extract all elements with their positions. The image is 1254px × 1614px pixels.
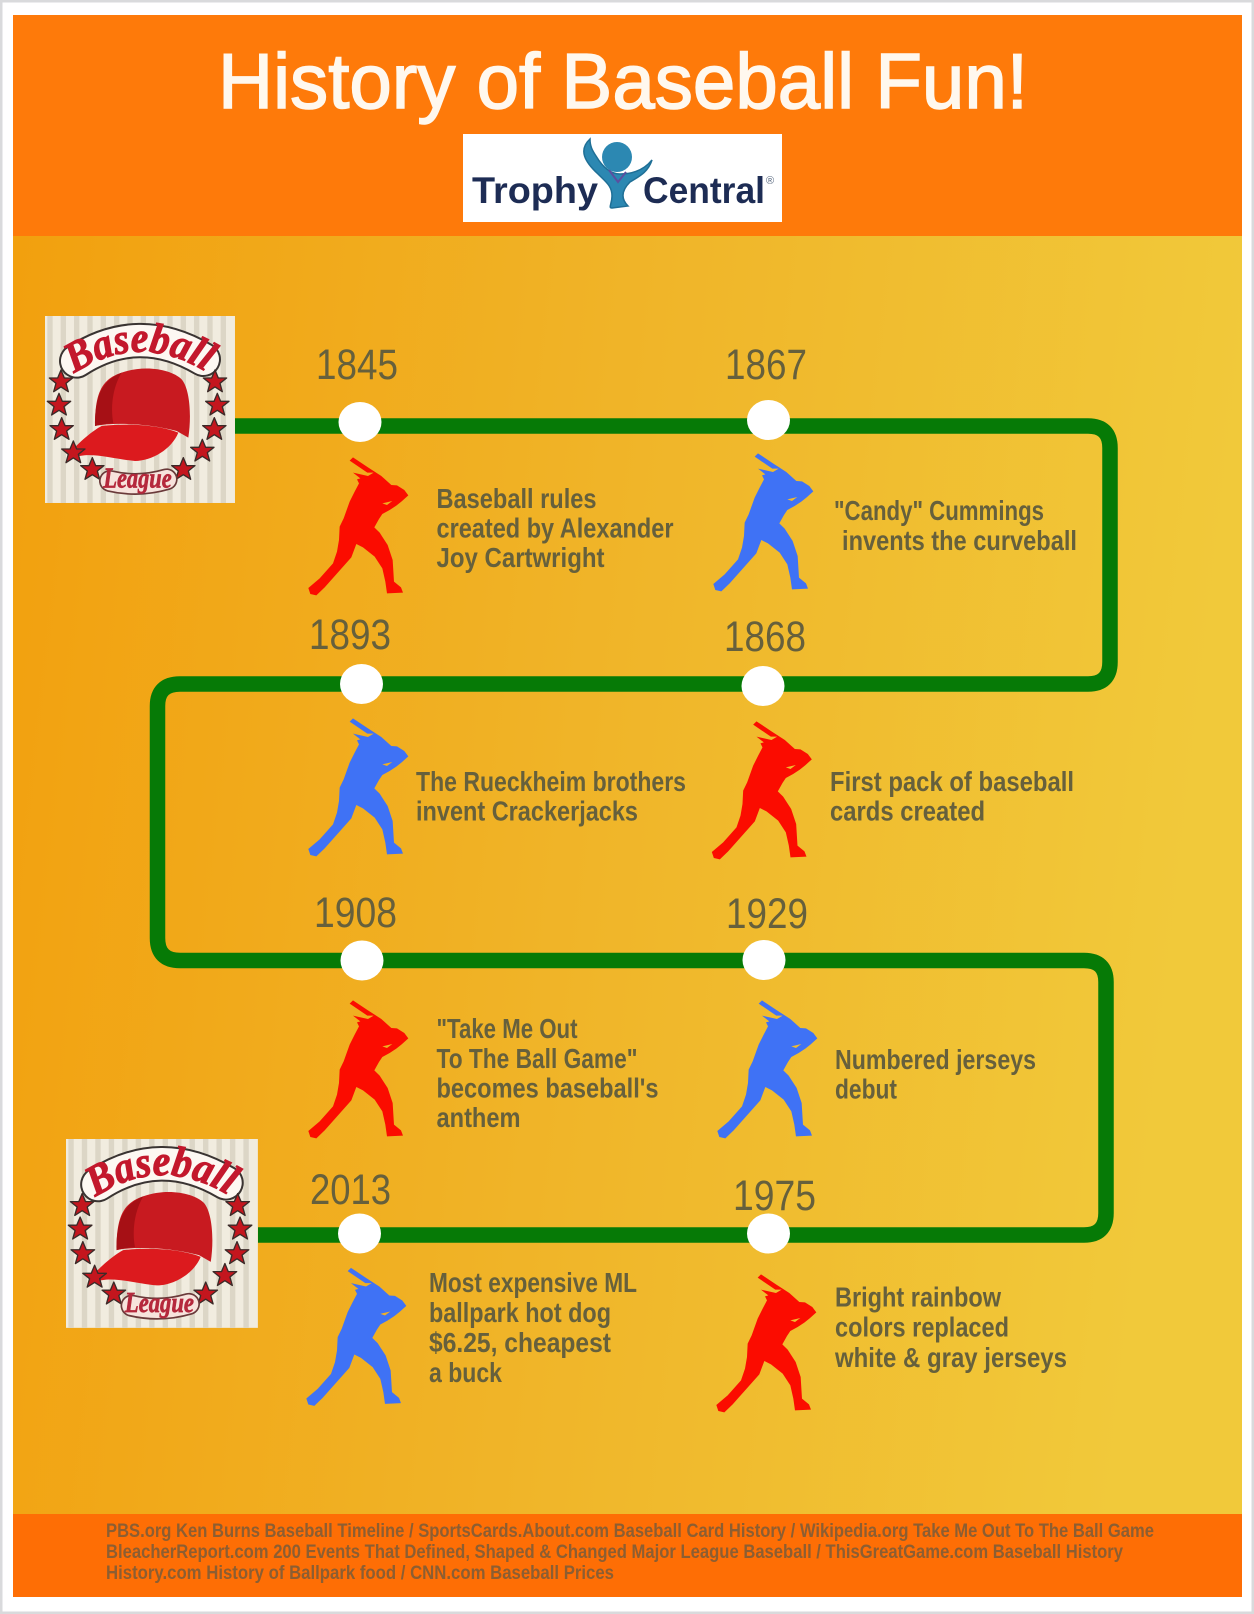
marker: [340, 664, 383, 704]
year: 1975: [733, 1172, 816, 1220]
text: [429, 1267, 637, 1388]
text: ballpark hot dog: [429, 1297, 611, 1328]
footer band: sources: History.com History of Ballpark food / CNN.com Baseball Prices: [106, 1563, 614, 1584]
milestone 1908: [308, 889, 658, 1138]
header band: [13, 15, 1242, 236]
text: [436, 1013, 658, 1133]
text: white & gray jerseys: [834, 1342, 1067, 1373]
milestone 1867: [713, 341, 1077, 591]
icon: red batter: [716, 1274, 816, 1412]
logo: Trophy Central: Trophy: [472, 170, 598, 211]
text: Joy Cartwright: [436, 542, 604, 573]
year: 1908: [314, 889, 397, 937]
text: anthem: [436, 1102, 520, 1133]
text: [834, 495, 1077, 556]
logo: Trophy Central: [463, 134, 782, 222]
text: colors replaced: [835, 1312, 1009, 1342]
text: Numbered jerseys: [835, 1044, 1036, 1075]
footer band: sources: [13, 1514, 1242, 1597]
text: The Rueckheim brothers: [416, 766, 686, 797]
text: [830, 766, 1074, 826]
year: 1929: [726, 890, 808, 938]
marker: [747, 1214, 790, 1254]
text: debut: [835, 1074, 897, 1104]
milestone 1893: [308, 611, 686, 856]
icon: blue batter: [717, 1000, 817, 1138]
footer band: sources: BleacherReport.com 200 Events That Defined, Shaped & Changed Major League Baseball / ThisGreatGame.com Baseball History: [106, 1542, 1123, 1563]
milestone 1929: [717, 890, 1036, 1138]
marker: [742, 666, 784, 706]
title: History of Baseball Fun!: [218, 37, 1028, 125]
text: a buck: [429, 1357, 502, 1388]
marker: [338, 402, 382, 442]
year: 1867: [725, 341, 807, 389]
text: [436, 483, 674, 573]
text: [416, 766, 686, 826]
marker: [747, 400, 790, 440]
icon: red batter: [308, 457, 408, 595]
milestone 2013: [306, 1166, 637, 1406]
icon: blue batter: [306, 1268, 406, 1406]
logo: Trophy Central: Central: [643, 170, 765, 211]
icon: red batter: [712, 721, 812, 859]
green timeline path: [158, 426, 1110, 1235]
year: 1893: [309, 611, 391, 659]
text: Bright rainbow: [835, 1282, 1001, 1312]
icon: red batter: [308, 1000, 408, 1138]
text: Baseball rules: [436, 483, 596, 514]
text: [834, 1282, 1067, 1373]
text: "Take Me Out: [436, 1013, 578, 1044]
badge: baseball league bottom: [66, 1138, 258, 1328]
year: 2013: [310, 1166, 391, 1214]
panel: timeline background: [13, 236, 1242, 1514]
text: created by Alexander: [436, 512, 674, 544]
text: invent Crackerjacks: [416, 796, 638, 826]
icon: blue batter: [308, 718, 408, 856]
text: [835, 1044, 1036, 1104]
marker: [340, 940, 384, 980]
text: invents the curveball: [842, 525, 1077, 556]
text: cards created: [830, 796, 985, 826]
text: First pack of baseball: [830, 766, 1074, 797]
text: becomes baseball's: [436, 1072, 658, 1104]
milestone 1868: [712, 613, 1074, 859]
milestone 1845: [308, 341, 674, 595]
marker: [338, 1214, 381, 1254]
text: To The Ball Game": [436, 1043, 638, 1074]
year: 1845: [316, 341, 398, 389]
text: $6.25, cheapest: [429, 1327, 611, 1358]
logo: Trophy Central: ®: [766, 175, 774, 187]
icon: blue batter: [713, 453, 813, 591]
badge: baseball league top: [45, 315, 235, 503]
marker: [742, 940, 786, 980]
text: "Candy" Cummings: [834, 495, 1044, 526]
text: Most expensive ML: [429, 1267, 637, 1298]
year: 1868: [724, 613, 806, 661]
milestone 1975: [716, 1172, 1067, 1412]
